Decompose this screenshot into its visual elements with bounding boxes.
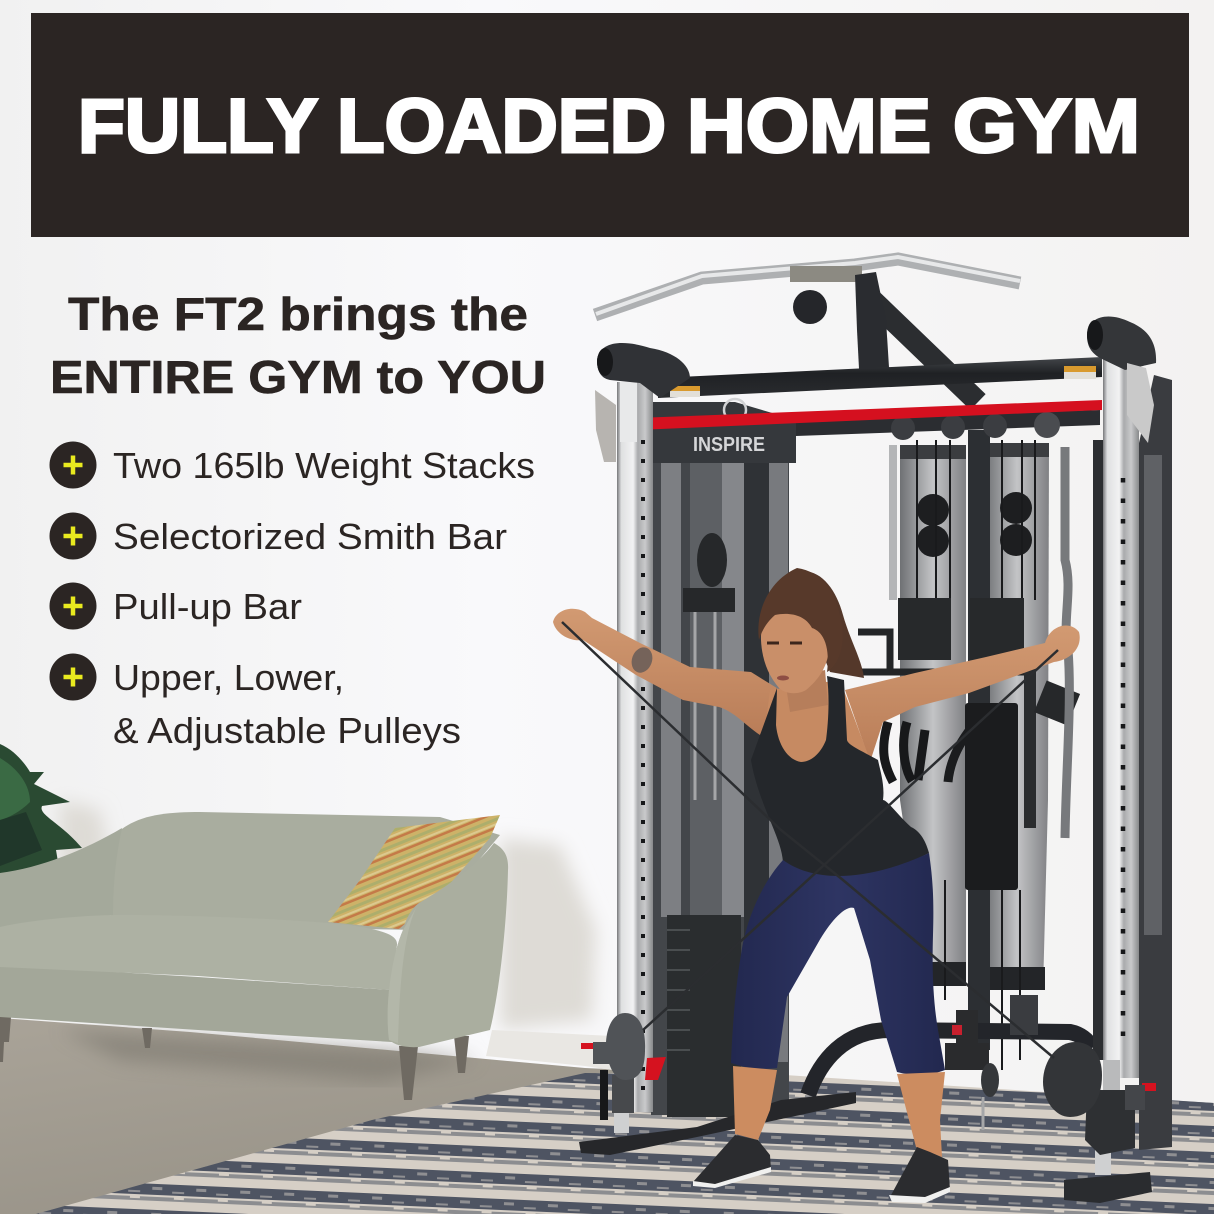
feature: smith bar: Selectorized Smith Bar [113, 516, 507, 557]
right shoe [693, 1135, 771, 1188]
left stack guide rods [695, 612, 715, 800]
red smith bar [637, 400, 1102, 430]
tattoo [628, 644, 656, 676]
feature: weight stacks: Two 165lb Weight Stacks [113, 445, 535, 486]
center mesh panels [855, 430, 1080, 1070]
floor [0, 1018, 1214, 1214]
sofa left arm [0, 828, 122, 930]
right calf [733, 1066, 777, 1140]
title: FULLY [78, 84, 318, 169]
left arm and hand [553, 609, 780, 735]
storage bar [889, 445, 897, 600]
weight pulleys [917, 494, 949, 526]
sofa back [110, 812, 500, 930]
left shoe [889, 1147, 950, 1203]
plant [0, 744, 82, 874]
ponytail [790, 571, 864, 678]
mouth [777, 676, 789, 680]
title: HOME [687, 84, 931, 169]
sofa legs [0, 1017, 469, 1100]
cushion [328, 815, 500, 929]
right top pulley [1087, 316, 1156, 370]
home gym machine [579, 257, 1172, 1203]
rear right panel [1139, 375, 1172, 1150]
subheading [50, 288, 546, 403]
title banner [31, 13, 1189, 237]
feature: pull-up bar [50, 582, 302, 630]
left header plate [653, 399, 796, 463]
subheading: The FT2 brings the [68, 288, 528, 340]
feature: pulleys [50, 654, 461, 751]
sofa and plant shadows on wall [60, 800, 596, 1030]
right post [1093, 358, 1139, 1078]
left side bracket [595, 390, 616, 462]
subheading: ENTIRE GYM to YOU [50, 351, 546, 403]
curved handle [948, 720, 978, 782]
sofa [0, 812, 508, 1100]
feature: pulleys: & Adjustable Pulleys [113, 710, 461, 751]
left header plate: INSPIRE [693, 434, 765, 456]
leggings [731, 853, 945, 1075]
sofa shadow on floor [60, 1030, 480, 1082]
rug [36, 1073, 1214, 1214]
eyes [767, 642, 802, 644]
rear beam with pulleys [796, 410, 1100, 440]
sofa seat cushion [0, 915, 397, 990]
right hanging bracket [1127, 363, 1154, 443]
left stack pulley [683, 533, 735, 612]
center lower frame [808, 995, 1092, 1130]
chest [760, 680, 870, 770]
right base [1043, 1042, 1156, 1203]
feature list [50, 442, 535, 751]
warning labels [670, 366, 1096, 397]
left base [579, 1013, 856, 1155]
rope handles [884, 722, 925, 782]
title: LOADED [337, 84, 666, 169]
sofa right arm [388, 843, 508, 1047]
long strap [965, 703, 1018, 890]
feature: pull-up bar: Pull-up Bar [113, 586, 302, 627]
left post [617, 382, 653, 1112]
title [78, 84, 1140, 169]
baseboard [486, 1030, 612, 1070]
pull-up bar [595, 257, 1020, 402]
ankle strap bracket [1034, 680, 1080, 726]
woman exercising [553, 568, 1080, 1203]
title: GYM [953, 84, 1140, 169]
resistance cables [562, 622, 1058, 1058]
head [758, 568, 843, 693]
neck [785, 670, 828, 712]
curl bar [1065, 447, 1069, 838]
right arm and hand [845, 625, 1080, 762]
left weight column [651, 455, 789, 1115]
left weight stack [667, 915, 741, 1117]
left calf [897, 1072, 945, 1157]
sofa base [0, 965, 392, 1042]
left top pulley [597, 343, 690, 398]
foot plates [898, 598, 951, 660]
thin bar [1024, 660, 1036, 828]
feature: pulleys: Upper, Lower, [113, 657, 344, 698]
tank top [751, 676, 929, 884]
center column [968, 430, 990, 1050]
top crossbar [658, 357, 1102, 398]
feature: smith bar [50, 512, 507, 560]
